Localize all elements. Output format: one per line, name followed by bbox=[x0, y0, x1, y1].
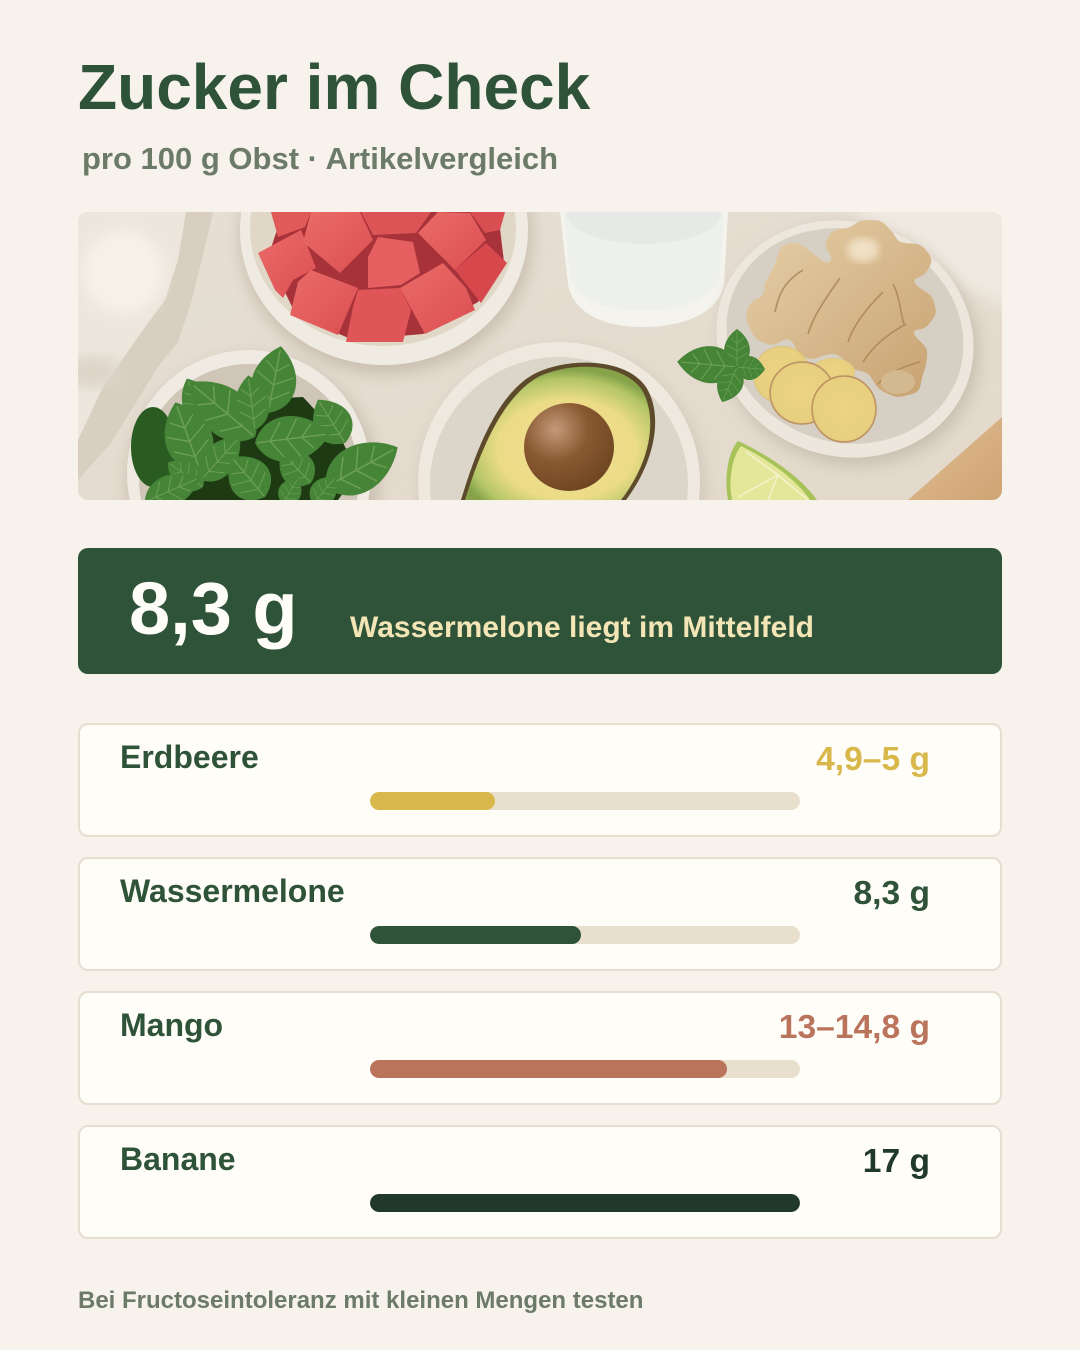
row: Banane bbox=[78, 1125, 1002, 1239]
banner text: Wassermelone liegt im Mittelfeld bbox=[350, 611, 814, 644]
row: Wassermelone bbox=[78, 857, 1002, 971]
ginger slices bbox=[753, 346, 876, 442]
watermelon bowl bbox=[240, 95, 532, 374]
table surface bbox=[78, 212, 1002, 500]
value: 13–14,8 g bbox=[779, 1009, 930, 1046]
label: Wassermelone bbox=[120, 873, 345, 909]
highlight banner bbox=[78, 548, 1002, 674]
label: Erdbeere bbox=[120, 739, 259, 775]
bar bbox=[370, 1194, 800, 1212]
avocado plate bbox=[418, 342, 704, 628]
mint bowl bbox=[127, 342, 409, 608]
towel bbox=[63, 212, 213, 480]
mint sprig bbox=[676, 329, 766, 407]
bar bbox=[370, 926, 800, 944]
photo: food flat lay bbox=[78, 212, 1002, 500]
light patch bbox=[718, 192, 1022, 312]
avocado bbox=[461, 363, 655, 500]
row: Erdbeere bbox=[78, 723, 1002, 837]
subtitle: pro 100 g Obst · Artikelvergleich bbox=[82, 141, 558, 176]
ginger plate bbox=[676, 185, 1013, 501]
title: Zucker im Check bbox=[78, 51, 590, 123]
lime wedge bbox=[726, 441, 817, 500]
row: Mango bbox=[78, 991, 1002, 1105]
label: Mango bbox=[120, 1007, 223, 1043]
value: 17 g bbox=[863, 1143, 930, 1180]
value: 8,3 g bbox=[853, 875, 930, 912]
mint leaves bbox=[131, 342, 409, 516]
bar bbox=[370, 1060, 800, 1078]
footnote: Bei Fructoseintoleranz mit kleinen Mengen testen bbox=[78, 1287, 643, 1314]
avocado pit bbox=[524, 403, 614, 491]
wood board bbox=[908, 417, 1002, 500]
bar bbox=[370, 792, 800, 810]
label: Banane bbox=[120, 1141, 236, 1177]
ginger root bbox=[748, 223, 934, 395]
water glass bbox=[560, 180, 728, 327]
value: 4,9–5 g bbox=[816, 741, 930, 778]
big number: 8,3 g bbox=[129, 567, 298, 650]
watermelon cubes bbox=[258, 212, 507, 342]
